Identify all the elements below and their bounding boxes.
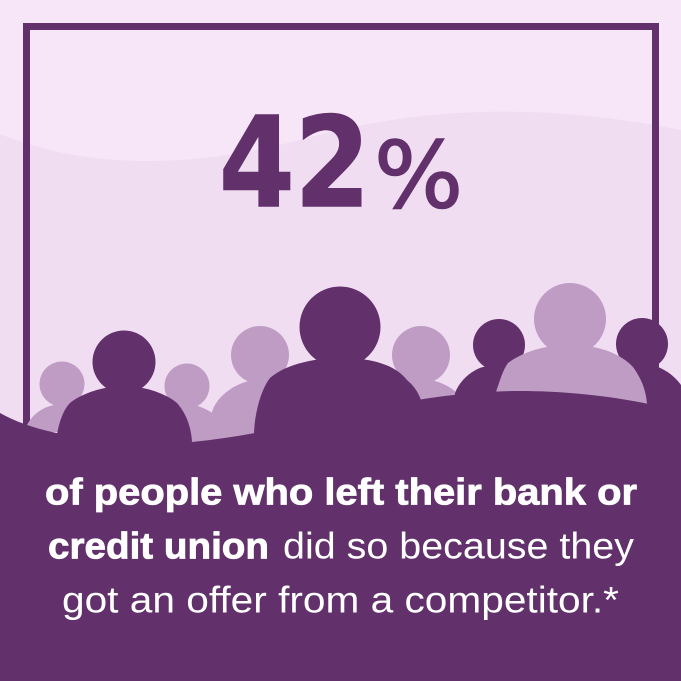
dark silhouettes, front row [57, 286, 421, 450]
foreground wave [0, 391, 681, 681]
frame [26, 26, 656, 526]
caption: got an offer from a competitor.* [62, 578, 619, 620]
caption [45, 470, 637, 620]
headline number: % [374, 122, 463, 229]
dark silhouettes, right side [455, 318, 681, 420]
headline number: 42 [219, 90, 370, 236]
caption: did so because they [283, 524, 634, 566]
large light silhouette [496, 283, 647, 420]
caption: credit union [48, 524, 269, 566]
headline number [219, 90, 463, 236]
caption: of people who left their bank or [45, 470, 637, 512]
light silhouettes, back row [24, 326, 458, 445]
